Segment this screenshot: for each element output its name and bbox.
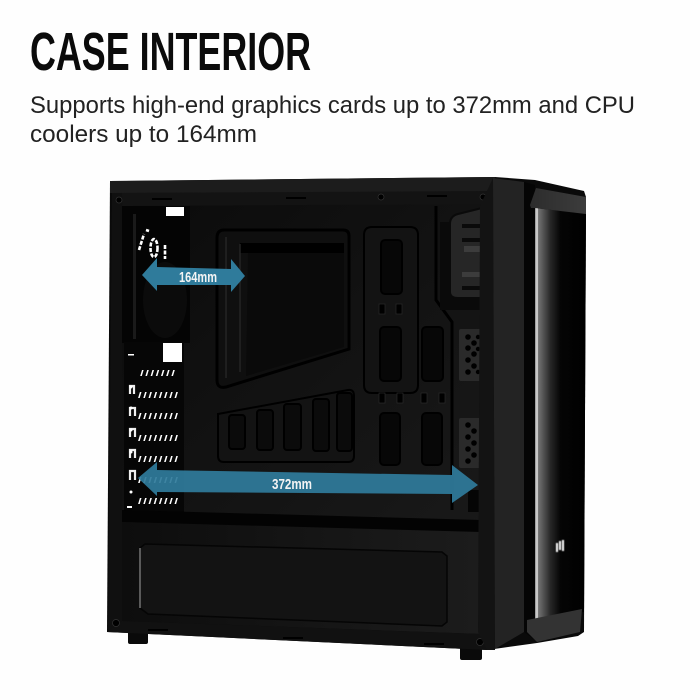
- arrow: 372mm graphics card length: 372mm: [272, 476, 312, 493]
- arrow: 372mm graphics card length: [138, 462, 478, 503]
- arrow: 164mm cooler clearance: 164mm: [179, 269, 217, 286]
- front bottom cap: [527, 609, 582, 642]
- cooler and fan bay: [122, 206, 190, 343]
- case side column: [478, 178, 535, 650]
- subtitle: [30, 92, 635, 148]
- CPU cut-out: [217, 230, 349, 387]
- subtitle: coolers up to 164mm: [30, 121, 257, 148]
- front top cap: [530, 188, 586, 214]
- left frame rail: [108, 193, 124, 632]
- PC case photo: [107, 177, 586, 660]
- cable routing holes: [364, 206, 452, 510]
- drive bays: [440, 208, 482, 512]
- logo on front: [556, 540, 564, 552]
- PCI expansion slots: [124, 342, 184, 514]
- bottom rail: [107, 621, 487, 650]
- case feet: [128, 630, 482, 660]
- arrow: 164mm cooler clearance: [142, 258, 245, 292]
- front glass panel: [535, 208, 586, 622]
- title: CASE INTERIOR: [30, 22, 311, 82]
- subtitle: Supports high-end graphics cards up to 372mm and CPU: [30, 92, 635, 119]
- lower tray cut-outs: [218, 390, 354, 462]
- motherboard tray: [122, 204, 482, 534]
- case silhouette: [107, 177, 586, 650]
- top rail: [110, 177, 495, 193]
- PSU shroud: [122, 510, 482, 634]
